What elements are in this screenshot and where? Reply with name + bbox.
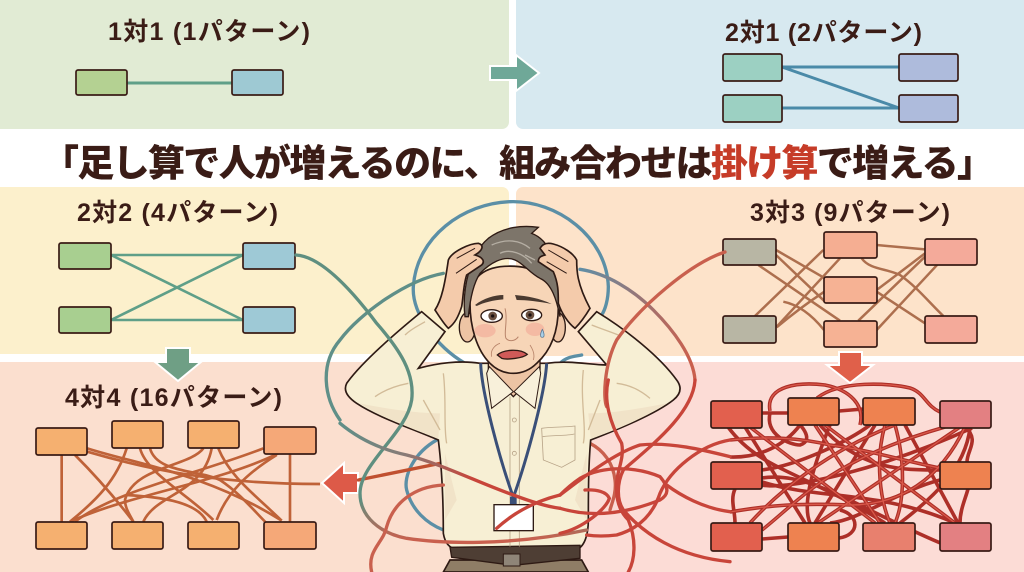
panel: 3対3: [516, 187, 1024, 356]
heading: 2対2: 2対2 (4パターン): [77, 199, 278, 227]
ears: [459, 313, 565, 342]
arrow: 2対2 to 4対4: [155, 348, 201, 381]
diagram: 1対1: [76, 70, 283, 95]
wires in front of the man: [296, 252, 730, 572]
diagram: 2対2: [59, 243, 295, 333]
arrow: 3対3 to network: [827, 352, 873, 383]
diagram: 3対3: [723, 232, 977, 347]
arrow: network to 4対4: [322, 463, 358, 503]
heading: 3対3: 3対3 (9パターン): [750, 199, 950, 227]
hair: [464, 226, 560, 317]
panel: 2対2: [0, 187, 509, 354]
hand left: [435, 243, 483, 328]
panel: 2対1: [516, 0, 1024, 129]
diagram: tangled network: [711, 384, 991, 551]
wires behind the man: [326, 202, 695, 530]
heading: 4対4: 4対4 (16パターン): [65, 384, 282, 412]
panel: 多対多: [516, 362, 1024, 572]
figure: overwhelmed man tangled in wires: [296, 202, 730, 572]
hand right: [538, 243, 590, 328]
collar: [487, 367, 541, 408]
title: 「足し算で人が増えるのに、組み合わせは掛け算で増える」: [42, 142, 994, 184]
panel: 1対1: [0, 0, 509, 129]
head and hands: [435, 226, 590, 373]
lanyard: [481, 363, 547, 497]
belt and trousers: [443, 545, 588, 572]
panel: 4対4: [0, 362, 520, 572]
right tangle: [560, 380, 730, 572]
facial features: [474, 295, 552, 360]
neck: [488, 360, 540, 397]
arrow: 1対1 to 2対1: [490, 55, 539, 91]
heading: 2対1: 2対1 (2パターン): [725, 19, 922, 47]
heading: 1対1: 1対1 (1パターン): [108, 18, 310, 46]
diagram: 2対1: [723, 54, 958, 122]
shirt: [345, 312, 680, 549]
center fill behind person: [505, 362, 525, 572]
name badge: [494, 497, 533, 531]
face: [470, 266, 558, 373]
shirt placket and buttons: [510, 397, 575, 547]
shirt shading and folds: [360, 322, 667, 520]
diagram: 4対4: [36, 421, 320, 549]
